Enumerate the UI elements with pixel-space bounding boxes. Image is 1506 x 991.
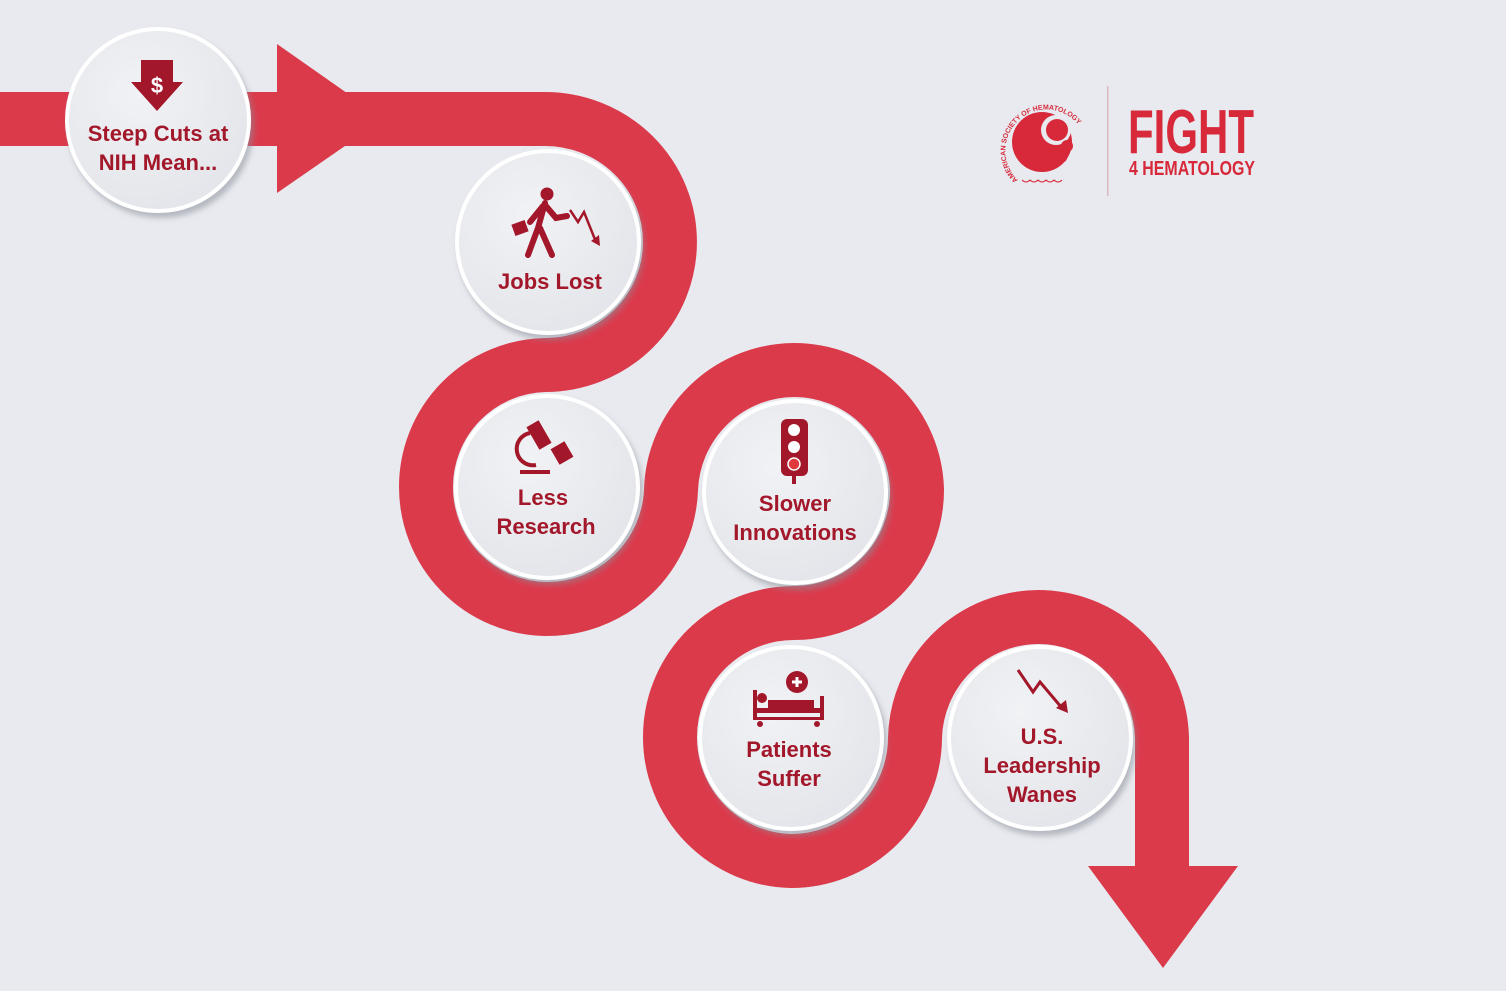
step 3: Less Research bbox=[456, 396, 638, 578]
icon: dollar down arrow bbox=[131, 60, 183, 111]
step 6: U.S. Leadership Wanes bbox=[949, 647, 1131, 829]
icon: declining arrow bbox=[1018, 670, 1068, 713]
step 4: Slower Innovations: Innovations bbox=[733, 520, 857, 545]
icon: dollar down arrow: $ bbox=[151, 73, 163, 98]
icon: hospital bed bbox=[753, 671, 824, 727]
icon: microscope bbox=[517, 423, 571, 472]
red winding path bbox=[0, 44, 1238, 968]
step 3: Less Research: Research bbox=[496, 514, 596, 539]
step 1: Steep Cuts at NIH Mean: NIH Mean... bbox=[99, 150, 217, 175]
step 4: Slower Innovations bbox=[704, 401, 886, 583]
logo: ASH Fight 4 Hematology bbox=[1000, 86, 1256, 196]
step 1: Steep Cuts at NIH Mean bbox=[67, 29, 249, 211]
icon: traffic light bbox=[781, 419, 808, 484]
logo: ASH Fight 4 Hematology: FIGHT bbox=[1128, 98, 1254, 167]
logo: ASH Fight 4 Hematology: 4 HEMATOLOGY bbox=[1129, 158, 1256, 180]
step 6: U.S. Leadership Wanes: Wanes bbox=[1007, 782, 1077, 807]
step 4: Slower Innovations: Slower bbox=[759, 491, 832, 516]
step 2: Jobs Lost: Jobs Lost bbox=[498, 269, 603, 294]
step 5: Patients Suffer: Patients bbox=[746, 737, 832, 762]
step 2: Jobs Lost bbox=[457, 151, 639, 333]
step 6: U.S. Leadership Wanes: Leadership bbox=[983, 753, 1101, 778]
step 5: Patients Suffer bbox=[700, 647, 882, 829]
logo: ASH Fight 4 Hematology: AMERICAN SOCIETY OF HEMATOLOGY bbox=[1000, 104, 1082, 182]
step 1: Steep Cuts at NIH Mean: Steep Cuts at bbox=[88, 121, 229, 146]
icon: walking man with briefcase bbox=[511, 188, 600, 255]
step 3: Less Research: Less bbox=[518, 485, 568, 510]
step 6: U.S. Leadership Wanes: U.S. bbox=[1021, 724, 1063, 749]
step 5: Patients Suffer: Suffer bbox=[757, 766, 821, 791]
